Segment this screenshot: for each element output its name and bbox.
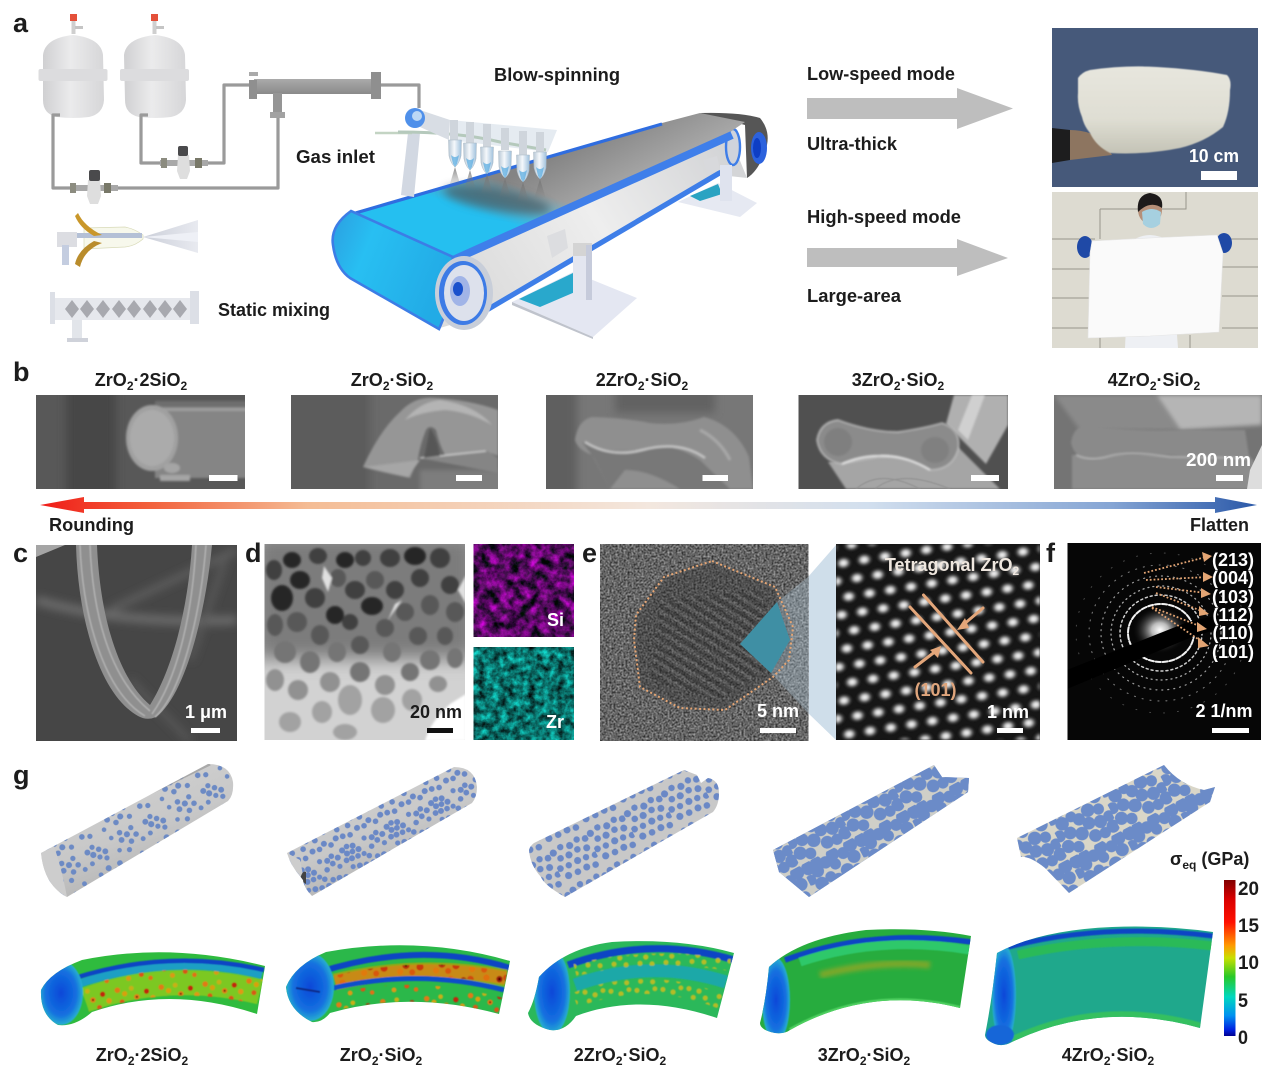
deposited fibre spray on belt bbox=[442, 180, 552, 220]
stress map: 3ZrO2·SiO2 bbox=[760, 929, 971, 1042]
title ZrO2·2SiO2: ·2SiO bbox=[134, 370, 181, 390]
title 3ZrO2·SiO2: ·SiO bbox=[900, 370, 938, 390]
stress map: 4ZrO2·SiO2 bbox=[985, 927, 1213, 1045]
title ZrO2·2SiO2: 2 bbox=[181, 379, 188, 393]
panel e: HRTEM images bbox=[582, 538, 1040, 741]
label ZrO2·2SiO2: ZrO bbox=[96, 1045, 128, 1065]
label Si: Si bbox=[547, 610, 564, 630]
atomic lattice image bbox=[836, 544, 1040, 740]
miller index labels: (213) bbox=[1212, 550, 1254, 570]
spinneret head bbox=[398, 108, 557, 155]
conveyor belt top surface bbox=[351, 113, 745, 257]
scale bar bbox=[456, 475, 482, 481]
panel f: SAED diffraction pattern bbox=[1046, 538, 1262, 740]
label ZrO2·SiO2: ZrO bbox=[340, 1045, 372, 1065]
icon: lower valve bbox=[70, 170, 118, 204]
EDS map: silicon bbox=[474, 544, 574, 637]
label (101) plane: (101) bbox=[914, 680, 957, 700]
scale bar bbox=[191, 728, 220, 733]
scale bar bbox=[1216, 475, 1243, 481]
SEM image: flatter dumbbell section bbox=[798, 395, 1008, 489]
label: ultra-thick: Ultra-thick bbox=[807, 134, 898, 154]
panel c: bent fibre SEM bbox=[13, 538, 237, 741]
label ZrO2·SiO2: ·SiO bbox=[378, 1045, 416, 1065]
icon: upper valve bbox=[160, 146, 208, 179]
icon: left precursor tank bbox=[38, 14, 108, 118]
icon: coaxial nozzle with gas flow bbox=[57, 213, 198, 267]
icon: gas static mixer tube bbox=[249, 72, 381, 118]
legend ticks: 5 bbox=[1238, 991, 1248, 1012]
title 3ZrO2·SiO2: 2 bbox=[938, 379, 945, 393]
SEM image: fibre with single groove bbox=[291, 395, 498, 489]
label 4ZrO2·SiO2: 4ZrO bbox=[1062, 1045, 1104, 1065]
teal magnified region bbox=[740, 602, 790, 673]
label ZrO2·2SiO2: 2 bbox=[128, 1054, 135, 1068]
label a: a bbox=[13, 8, 29, 38]
stress map: 2ZrO2·SiO2 bbox=[528, 941, 734, 1034]
title 4ZrO2·SiO2: ·SiO bbox=[1156, 370, 1194, 390]
title 4ZrO2·SiO2: 2 bbox=[1150, 379, 1157, 393]
EDS map: zirconium bbox=[474, 647, 574, 740]
title 4ZrO2·SiO2: 2 bbox=[1194, 379, 1201, 393]
diffraction image bbox=[1068, 543, 1261, 740]
scale label 1 μm: 1 μm bbox=[185, 702, 227, 722]
colour scale legend bbox=[1170, 849, 1259, 1049]
support leg of spinneret bbox=[401, 133, 420, 197]
icon: static mixing tube bbox=[50, 291, 199, 342]
miller index labels: (110) bbox=[1212, 623, 1254, 643]
title 3ZrO2·SiO2: 2 bbox=[894, 379, 901, 393]
coated cyan region of belt bbox=[351, 152, 625, 257]
scale label 10 cm: 10 cm bbox=[1189, 146, 1239, 166]
label f: f bbox=[1046, 538, 1056, 568]
label 4ZrO2·SiO2: 2 bbox=[1148, 1054, 1155, 1068]
scale label 200 nm: 200 nm bbox=[1186, 450, 1251, 470]
label e: e bbox=[582, 538, 597, 568]
scale bar bbox=[997, 728, 1023, 733]
lattice plane markers bbox=[910, 595, 983, 673]
label g: g bbox=[13, 760, 30, 790]
legend ticks: 15 bbox=[1238, 916, 1259, 937]
fibre model: ZrO2·2SiO2 bbox=[41, 764, 234, 897]
label 3ZrO2·SiO2: 3ZrO bbox=[818, 1045, 860, 1065]
scale bar bbox=[1212, 728, 1249, 733]
panel a: blow-spinning setup bbox=[13, 8, 1258, 348]
label b: b bbox=[13, 357, 30, 387]
label: static mixing: Static mixing bbox=[218, 300, 330, 320]
label tetragonal ZrO2: 2 bbox=[1012, 564, 1020, 578]
label 2ZrO2·SiO2: ·SiO bbox=[622, 1045, 660, 1065]
title ZrO2·SiO2: 2 bbox=[427, 379, 434, 393]
label ZrO2·SiO2: 2 bbox=[372, 1054, 379, 1068]
legend ticks: 20 bbox=[1238, 879, 1259, 900]
legend ticks bbox=[1238, 879, 1259, 1049]
label: high-speed mode: High-speed mode bbox=[807, 207, 961, 227]
label ZrO2·SiO2: 2 bbox=[416, 1054, 423, 1068]
conveyor base plates bbox=[512, 183, 757, 339]
label 3ZrO2·SiO2: 2 bbox=[904, 1054, 911, 1068]
fibre model: ZrO2·SiO2 bbox=[287, 767, 477, 896]
photo: ultra-thick sponge held in hand bbox=[1052, 28, 1258, 187]
scale bar bbox=[760, 728, 796, 733]
panel g: simulated fibres and stress maps bbox=[13, 755, 1259, 1068]
arrow: low-speed mode bbox=[807, 88, 1013, 129]
title ZrO2·SiO2: ·SiO bbox=[390, 370, 427, 390]
stress map: ZrO2·2SiO2 bbox=[39, 952, 265, 1025]
scale label 2 1/nm: 2 1/nm bbox=[1195, 701, 1253, 721]
legend title: (GPa) bbox=[1196, 849, 1249, 869]
label 4ZrO2·SiO2: 2 bbox=[1104, 1054, 1111, 1068]
label: low-speed mode: Low-speed mode bbox=[807, 64, 955, 84]
spinneret nozzles with spray cones bbox=[448, 140, 546, 202]
photo: person holding large-area sheet bbox=[1052, 192, 1258, 348]
beam stopper bbox=[1067, 616, 1215, 689]
conveyor front curved belt bbox=[333, 211, 453, 329]
label: gas inlet: Gas inlet bbox=[296, 147, 375, 167]
SEM image: nearly flat ribbon section bbox=[1054, 395, 1262, 489]
label Zr: Zr bbox=[546, 712, 564, 732]
scale label 20 nm: 20 nm bbox=[410, 702, 462, 722]
label c: c bbox=[13, 538, 28, 568]
scale bar bbox=[1201, 171, 1237, 180]
title ZrO2·2SiO2: ZrO bbox=[95, 370, 127, 390]
label: rounding: Rounding bbox=[49, 515, 134, 535]
legend title: σ bbox=[1170, 849, 1182, 869]
miller index labels bbox=[1212, 550, 1254, 662]
title 4ZrO2·SiO2: 4ZrO bbox=[1108, 370, 1150, 390]
title 2ZrO2·SiO2: 2 bbox=[638, 379, 645, 393]
label: blow-spinning: Blow-spinning bbox=[494, 65, 620, 85]
conveyor belt machine bbox=[333, 108, 768, 339]
legend title: eq bbox=[1182, 858, 1196, 872]
legend ticks: 0 bbox=[1238, 1028, 1248, 1049]
panel b: fibre cross sections bbox=[13, 357, 1262, 535]
scale label 1 nm: 1 nm bbox=[987, 702, 1029, 722]
title 3ZrO2·SiO2: 3ZrO bbox=[852, 370, 894, 390]
conveyor support legs bbox=[573, 165, 732, 300]
icon: right precursor tank bbox=[120, 14, 189, 118]
fibre model: 3ZrO2·SiO2 bbox=[770, 760, 975, 900]
label d: d bbox=[245, 538, 262, 568]
panel d: STEM and EDS maps bbox=[245, 534, 574, 741]
conveyor near edge rail bbox=[453, 135, 732, 260]
title ZrO2·2SiO2: 2 bbox=[127, 379, 134, 393]
SEM image: round fibre section bbox=[36, 395, 245, 489]
scale bar bbox=[702, 475, 728, 481]
gas supply tube bbox=[375, 132, 412, 134]
title 2ZrO2·SiO2: ·SiO bbox=[644, 370, 682, 390]
zoom wedge between HRTEM images bbox=[808, 545, 836, 740]
conveyor side panel bbox=[440, 129, 747, 328]
fibre model: 4ZrO2·SiO2 bbox=[1017, 765, 1215, 893]
scale label 5 nm: 5 nm bbox=[757, 701, 799, 721]
conveyor far roller bbox=[700, 113, 768, 178]
dotted grain outline bbox=[634, 561, 793, 710]
SEM image of bent ribbon fibre bbox=[36, 545, 237, 741]
scale bar bbox=[209, 475, 238, 481]
label 4ZrO2·SiO2: ·SiO bbox=[1110, 1045, 1148, 1065]
label ZrO2·2SiO2: 2 bbox=[182, 1054, 189, 1068]
conveyor front roller end bbox=[435, 256, 493, 330]
label ZrO2·2SiO2: ·2SiO bbox=[134, 1045, 182, 1065]
conveyor far edge rail bbox=[352, 124, 662, 214]
label 2ZrO2·SiO2: 2 bbox=[660, 1054, 667, 1068]
title 2ZrO2·SiO2: 2 bbox=[682, 379, 689, 393]
scale bar bbox=[427, 728, 453, 733]
arrow heads bbox=[1197, 552, 1213, 648]
colour bar bbox=[1224, 880, 1236, 1036]
label: large-area: Large-area bbox=[807, 286, 902, 306]
bottom labels bbox=[96, 1045, 1155, 1068]
title ZrO2·SiO2: ZrO bbox=[351, 370, 383, 390]
title ZrO2·SiO2: 2 bbox=[383, 379, 390, 393]
dotted index arrows bbox=[1144, 557, 1208, 643]
pipes connecting tanks to mixer bbox=[53, 85, 419, 188]
label tetragonal ZrO2: Tetragonal ZrO bbox=[885, 555, 1012, 575]
label 3ZrO2·SiO2: 2 bbox=[860, 1054, 867, 1068]
miller index labels: (103) bbox=[1212, 587, 1254, 607]
title 2ZrO2·SiO2: 2ZrO bbox=[596, 370, 638, 390]
legend ticks: 10 bbox=[1238, 953, 1259, 974]
label: flatten: Flatten bbox=[1190, 515, 1249, 535]
STEM image with nanoparticles bbox=[264, 544, 465, 740]
stress map: ZrO2·SiO2 bbox=[286, 945, 510, 1022]
HRTEM image of grain bbox=[600, 544, 808, 741]
miller index labels: (112) bbox=[1212, 605, 1254, 625]
label 2ZrO2·SiO2: 2ZrO bbox=[574, 1045, 616, 1065]
arrow: high-speed mode bbox=[807, 239, 1008, 276]
scale bar bbox=[971, 475, 999, 481]
miller index labels: (101) bbox=[1212, 642, 1254, 662]
gradient double arrow: rounding to flatten bbox=[40, 497, 1257, 513]
label 2ZrO2·SiO2: 2 bbox=[616, 1054, 623, 1068]
miller index labels: (004) bbox=[1212, 568, 1254, 588]
label 3ZrO2·SiO2: ·SiO bbox=[866, 1045, 904, 1065]
fibre model: 2ZrO2·SiO2 bbox=[529, 770, 719, 897]
SEM image: dumbbell fibre section bbox=[546, 395, 753, 489]
